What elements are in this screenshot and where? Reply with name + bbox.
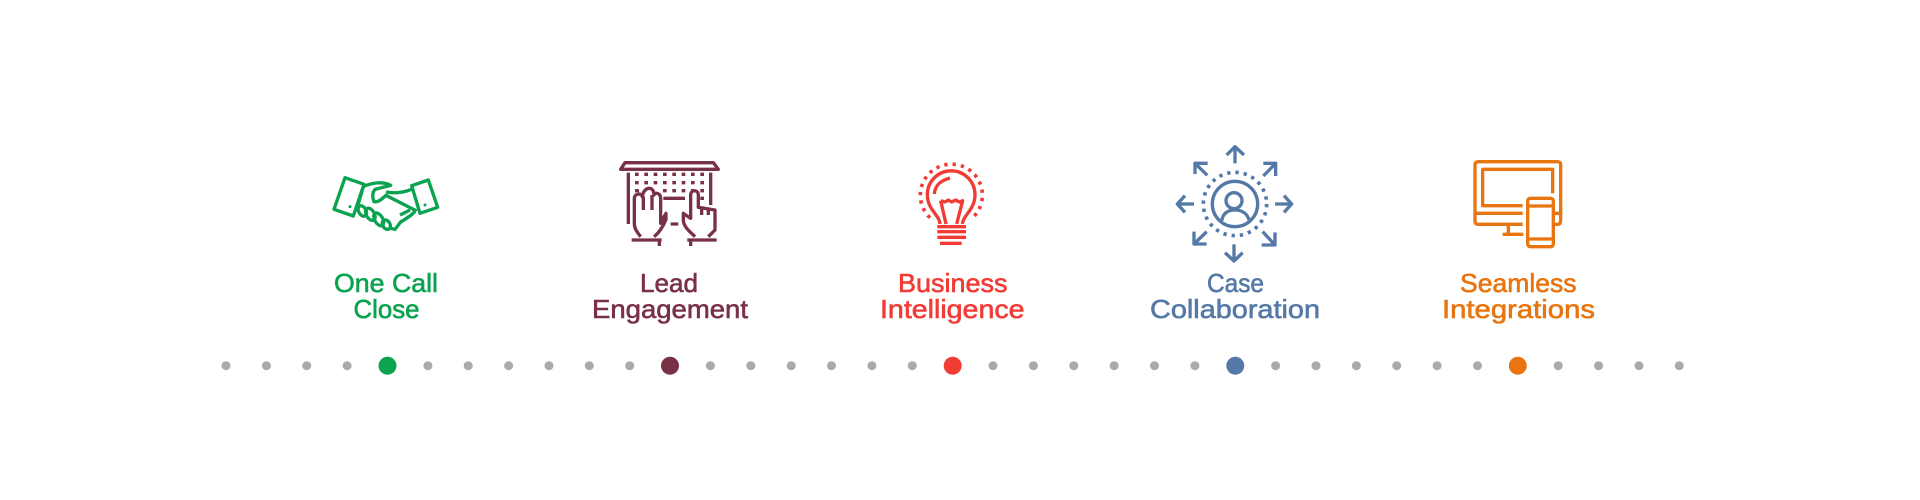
label: Case Collaboration xyxy=(1150,268,1320,324)
label: Lead Engagement: Lead xyxy=(640,268,698,298)
label: Business Intelligence: Business xyxy=(898,268,1008,298)
label: Seamless Integrations: Seamless xyxy=(1460,268,1576,298)
panel: Lead Engagement xyxy=(592,163,749,324)
icon: hands on keyboard xyxy=(621,163,718,246)
label: One Call Close: Close xyxy=(354,294,420,324)
label: Lead Engagement xyxy=(592,268,749,324)
marker: Lead Engagement xyxy=(661,357,679,375)
panel: Seamless Integrations xyxy=(1442,162,1595,324)
icon: light bulb xyxy=(920,164,982,243)
panel: Business Intelligence xyxy=(880,164,1024,324)
label: Case Collaboration: Case xyxy=(1207,268,1264,298)
timeline dots xyxy=(222,357,1684,375)
label: Lead Engagement: Engagement xyxy=(592,294,749,324)
label: Seamless Integrations: Integrations xyxy=(1442,294,1595,324)
marker: Seamless Integrations xyxy=(1509,357,1527,375)
icon: monitor and phone xyxy=(1475,162,1561,247)
marker: Case Collaboration xyxy=(1226,357,1244,375)
label: Seamless Integrations xyxy=(1442,268,1595,324)
label: Case Collaboration: Collaboration xyxy=(1150,294,1320,324)
marker: Business Intelligence xyxy=(944,357,962,375)
label: Business Intelligence: Intelligence xyxy=(880,294,1024,324)
icon: handshake xyxy=(334,178,438,231)
panel: One Call Close xyxy=(334,178,438,324)
label: One Call Close: One Call xyxy=(334,268,438,298)
label: Business Intelligence xyxy=(880,268,1024,324)
panel: Case Collaboration xyxy=(1150,147,1320,324)
marker: One Call Close xyxy=(378,357,396,375)
icon: person with radiating arrows xyxy=(1177,147,1292,261)
label: One Call Close xyxy=(334,268,438,324)
